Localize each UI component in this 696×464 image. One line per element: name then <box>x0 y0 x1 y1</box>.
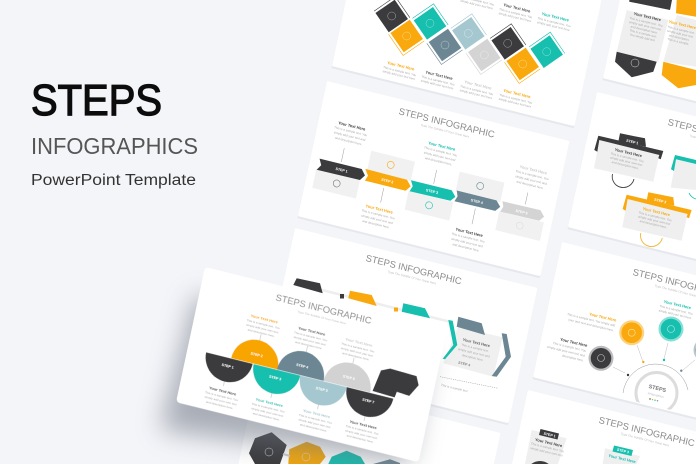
card step 1: This is a sample text. You <box>610 151 645 163</box>
text: step 4: Your Text Here <box>298 325 327 337</box>
slide A: diamond steps: This is a sample text. You <box>421 75 455 87</box>
slide E: columns: Your Text Here <box>668 19 696 30</box>
text: step 1: simply add your own text <box>204 394 237 406</box>
slide C: tabbed steps <box>267 230 536 423</box>
slide A: diamond steps: simply add your text here <box>459 88 493 100</box>
slide A: diamond steps: This is a sample text. You <box>537 16 571 28</box>
slide A: diamond steps: Your Text Here <box>425 69 454 81</box>
radial arc and connectors <box>623 364 688 393</box>
slide G: radial steps: This is a sample text. You <box>553 341 587 353</box>
text: step 4: and description here. <box>295 340 323 351</box>
text: step 7: Your Text Here <box>349 419 378 430</box>
slide B: arrow timeline: simply add your text and <box>361 213 394 225</box>
step labels: STEP 1 <box>221 363 234 370</box>
slide B: arrow timeline: Type The Subtitle Of Your Great Here <box>420 123 470 139</box>
slide G: radial steps: Your Text Here <box>560 337 589 348</box>
slide E: columns: This is a sample text. <box>629 28 658 39</box>
slide B: arrow timeline: This is a sample text. You <box>451 232 485 244</box>
card step 3: This is a sample text. You <box>638 210 673 222</box>
slide A: diamond steps: simply add your text here <box>382 69 416 81</box>
slide B: arrow timeline: This is a sample text. You <box>515 169 549 181</box>
dark end hexagon <box>372 366 421 403</box>
diamond tiles <box>374 0 565 83</box>
slide A: diamond steps: Your Text Here <box>387 60 416 72</box>
text: step 3: Your Text Here <box>255 396 284 408</box>
slide B connector lines <box>335 147 528 237</box>
text: step 5: simply add your own text <box>298 417 331 429</box>
slide B text blocks: Your Text Here <box>338 120 367 132</box>
slide B: arrow timeline: simply add your text and <box>451 237 484 249</box>
slide H: label cards <box>514 392 696 464</box>
radial text blocks: your own text and description here. <box>568 318 615 332</box>
text: step 1: This is a sample text. You <box>205 390 239 402</box>
text: step 5: This is a sample text. You <box>299 413 333 425</box>
front slide: semicircle steps: STEP 7 <box>362 398 375 405</box>
card step 3 <box>622 192 692 247</box>
slide C text: simply add your text and <box>458 347 490 359</box>
text: step 2 <box>244 312 282 339</box>
slide A: diamond steps: Your Text Here <box>503 2 532 14</box>
tagline: PowerPoint Template: PowerPoint Template <box>31 172 196 189</box>
slide A: diamond steps: This is a sample text. You <box>383 65 417 77</box>
text: step 2: Your Text Here <box>250 313 279 325</box>
card step 3: STEP 3 <box>654 198 667 204</box>
front slide: semicircle steps: STEP 2 <box>250 352 263 359</box>
radial text blocks: Your Text Here <box>589 311 618 323</box>
slide C text: description here. <box>461 353 484 362</box>
front slide: semicircle steps <box>176 267 447 462</box>
slide E: columns <box>604 0 696 102</box>
slide A: diamond steps: This is a sample text. You <box>460 84 494 96</box>
slide B arrows <box>317 158 366 181</box>
slide B: arrow timeline: STEP 2 <box>381 178 394 184</box>
slide C text: Your Text Here <box>462 337 491 348</box>
slide A: diamond steps: simply add your text here <box>498 11 532 23</box>
slide A: diamond steps: Your Text Here <box>503 88 532 99</box>
diamond icons <box>388 12 551 68</box>
front slide: semicircle steps: STEP 3 <box>269 375 282 382</box>
slide B: arrow timeline: and description here. <box>452 242 480 253</box>
slide G: radial steps: This is a sample text. You <box>659 304 693 316</box>
text: step 3: simply add your own text <box>251 406 284 418</box>
slide B: arrow timeline: and description here. <box>425 156 453 167</box>
slide B: arrow timeline: Your Text Here <box>428 140 457 152</box>
slide B: arrow timeline: This is a sample text. You <box>361 208 395 220</box>
slide A: diamond steps: Your Text Here <box>464 79 493 91</box>
text: step 5: Your Text Here <box>303 408 331 419</box>
lower semicircles <box>201 352 253 387</box>
text: step 2: This is a sample text. You <box>246 318 280 330</box>
text: step 1 <box>203 384 240 411</box>
step connector ticks <box>223 328 376 421</box>
card step 1: Your Text Here <box>614 147 643 158</box>
slide B heading: STEPS INFOGRAPHIC <box>398 105 496 140</box>
slide B: arrow timeline: Your Text Here <box>455 227 484 238</box>
slide A: diamond steps: simply add your text here <box>420 79 454 91</box>
slide C: tabbed steps: This is a sample text <box>440 383 468 393</box>
slide B: arrow timeline: simply add your text and <box>515 174 548 186</box>
card step 1: STEP 1 <box>626 139 639 145</box>
slide B: arrow timeline: Your Text Here <box>519 164 548 176</box>
front slide: semicircle steps: STEP 5 <box>315 386 328 393</box>
text: step 3 <box>249 396 287 422</box>
slide B: arrow timeline: This is a sample text. You <box>424 145 458 158</box>
text: step 7: This is a sample text. You <box>345 424 379 436</box>
slide H: label cards: Type The Subtitle Of Your Great Here <box>620 432 670 448</box>
slide B: arrow timeline: and description here. <box>335 136 363 146</box>
slide A: diamond steps: Your Text Here <box>541 11 570 23</box>
upper semicircles <box>231 335 283 370</box>
slide C: tabbed steps: STEP 4 <box>458 361 471 367</box>
slide E: columns: Your Text Here <box>633 11 662 22</box>
text: step 6 <box>339 336 376 363</box>
slide A: diamond steps: simply add your text here <box>537 20 570 32</box>
slide G: radial steps: simply add your text here <box>658 308 692 320</box>
slide C: tabbed steps: STEPS INFOGRAPHIC <box>365 252 463 287</box>
slide B: arrow timeline: simply add your text and <box>333 130 366 142</box>
slide B grey boxes <box>312 138 550 244</box>
slide D hexagons <box>249 432 287 464</box>
slide B: arrow timeline: STEP 4 <box>470 198 483 205</box>
text: step 7: and description here. <box>346 433 374 444</box>
slide A: diamond steps: simply add your text here <box>498 97 532 109</box>
text: step 2: simply add your own text <box>246 323 279 335</box>
slide D: hexagon steps <box>240 375 499 464</box>
slide B: arrow timeline: This is a sample text. You <box>334 125 368 137</box>
slide H: label cards: STEP 3 <box>616 448 629 454</box>
text: step 6: and description here. <box>342 351 370 362</box>
radial text blocks <box>566 306 618 333</box>
front slide: semicircle steps: STEP 6 <box>342 374 355 381</box>
slide B: arrow timeline: STEP 5 <box>515 209 528 216</box>
slide E: columns: You simply add text <box>629 32 656 42</box>
slide C strip and tabs <box>322 290 450 322</box>
text: step 5 <box>297 407 334 434</box>
radial text blocks: This is a sample text. You simply add <box>567 312 616 328</box>
card step 3: Your Text Here <box>642 206 671 217</box>
slide B: arrow timeline: simply add your text and <box>423 150 456 162</box>
card step 1 <box>594 133 663 188</box>
text: step 2: and description here. <box>247 328 275 338</box>
text: step 5: and description here. <box>300 422 328 433</box>
text: step 6: simply add your own text <box>340 346 373 358</box>
slide H: label cards: Your Text Here <box>608 453 637 464</box>
slide E: columns: This is a sample. <box>667 37 690 46</box>
slide C: tabbed steps: Type The Subtitle Of Your Great Here <box>387 270 437 286</box>
card step 2 <box>671 155 696 199</box>
slide E: columns: This is a sample text. <box>667 25 695 35</box>
front heading: STEPS INFOGRAPHIC <box>275 292 373 326</box>
slide G: radial steps: simply add your own text and <box>547 345 586 358</box>
slide C text <box>456 336 493 363</box>
radial centre circle: Infographics <box>647 391 665 399</box>
slide E: columns: This is a sample text. You <box>629 16 663 28</box>
slide H: label cards: simply add your own text <box>530 446 563 458</box>
subtitle: INFOGRAPHICS: INFOGRAPHICS <box>31 133 198 159</box>
slide B: arrow timeline: and description here. <box>362 219 390 230</box>
card step 1: simply add your own text <box>610 155 643 167</box>
slide B icons <box>333 148 530 233</box>
card step 3: simply add your own text <box>638 214 671 226</box>
slide C text: This is a sample text. <box>461 343 489 353</box>
slide B: arrow timeline: STEP 1 <box>335 167 348 174</box>
front slide: semicircle steps: Type The Subtitle Of Your Great Here <box>297 310 347 326</box>
text: step 7: simply add your own text <box>345 428 378 440</box>
title: STEPS: STEPS <box>31 76 162 125</box>
text: step 4 <box>292 325 329 351</box>
text: step 7 <box>343 418 381 445</box>
slide B: arrow timeline: STEP 3 <box>426 188 438 195</box>
text: step 4: simply add your own text <box>293 335 326 347</box>
slide H: label cards: STEPS INFOGRAPHIC <box>598 414 696 449</box>
slide G: radial steps: Your Text Here <box>663 299 692 310</box>
slide E: columns: and description here. <box>630 24 658 35</box>
text: step 1: Your Text Here <box>209 385 238 397</box>
slide A: diamond steps: This is a sample text. You <box>499 93 533 105</box>
slide E: columns: simply add your text <box>667 29 694 39</box>
slide C chevrons <box>443 320 457 359</box>
slide E: columns: and description. <box>668 33 690 42</box>
slide F: bracket cards <box>569 94 696 259</box>
slide H: label cards: STEP 1 <box>543 432 556 438</box>
front slide shadow <box>160 295 430 464</box>
slide B: arrow timeline <box>299 83 568 276</box>
radial centre circle: STEPS <box>648 384 667 394</box>
slide G: radial steps <box>534 244 696 418</box>
slide H: label cards: This is a sample text. You <box>530 441 565 453</box>
slide E: columns: simply add your own text <box>629 20 662 32</box>
slide B: arrow timeline: and description here. <box>516 180 544 190</box>
card step 1: and description here. <box>611 160 640 170</box>
text: step 3: and description here. <box>252 411 281 422</box>
slide H: label cards: Your Text Here <box>535 437 564 448</box>
background slides group <box>240 0 696 464</box>
front slide: semicircle steps: STEP 4 <box>296 363 309 370</box>
text: step 4: This is a sample text. You <box>294 330 328 343</box>
card step 3: and description here. <box>639 219 668 229</box>
slide B: arrow timeline: Your Text Here <box>365 203 394 215</box>
text: step 1: and description here. <box>206 399 234 410</box>
slide A: diamond steps: This is a sample text. You <box>499 7 533 19</box>
radial centre circle <box>636 372 677 414</box>
text: step 3: This is a sample text. You <box>251 401 285 414</box>
text: step 6: Your Text Here <box>345 336 374 348</box>
slide G: radial steps: description here. <box>562 353 584 363</box>
radial node icons <box>598 326 674 362</box>
radial nodes <box>627 374 629 376</box>
slide A: diamond steps <box>333 0 600 126</box>
text: step 6: This is a sample text. You <box>341 342 375 354</box>
